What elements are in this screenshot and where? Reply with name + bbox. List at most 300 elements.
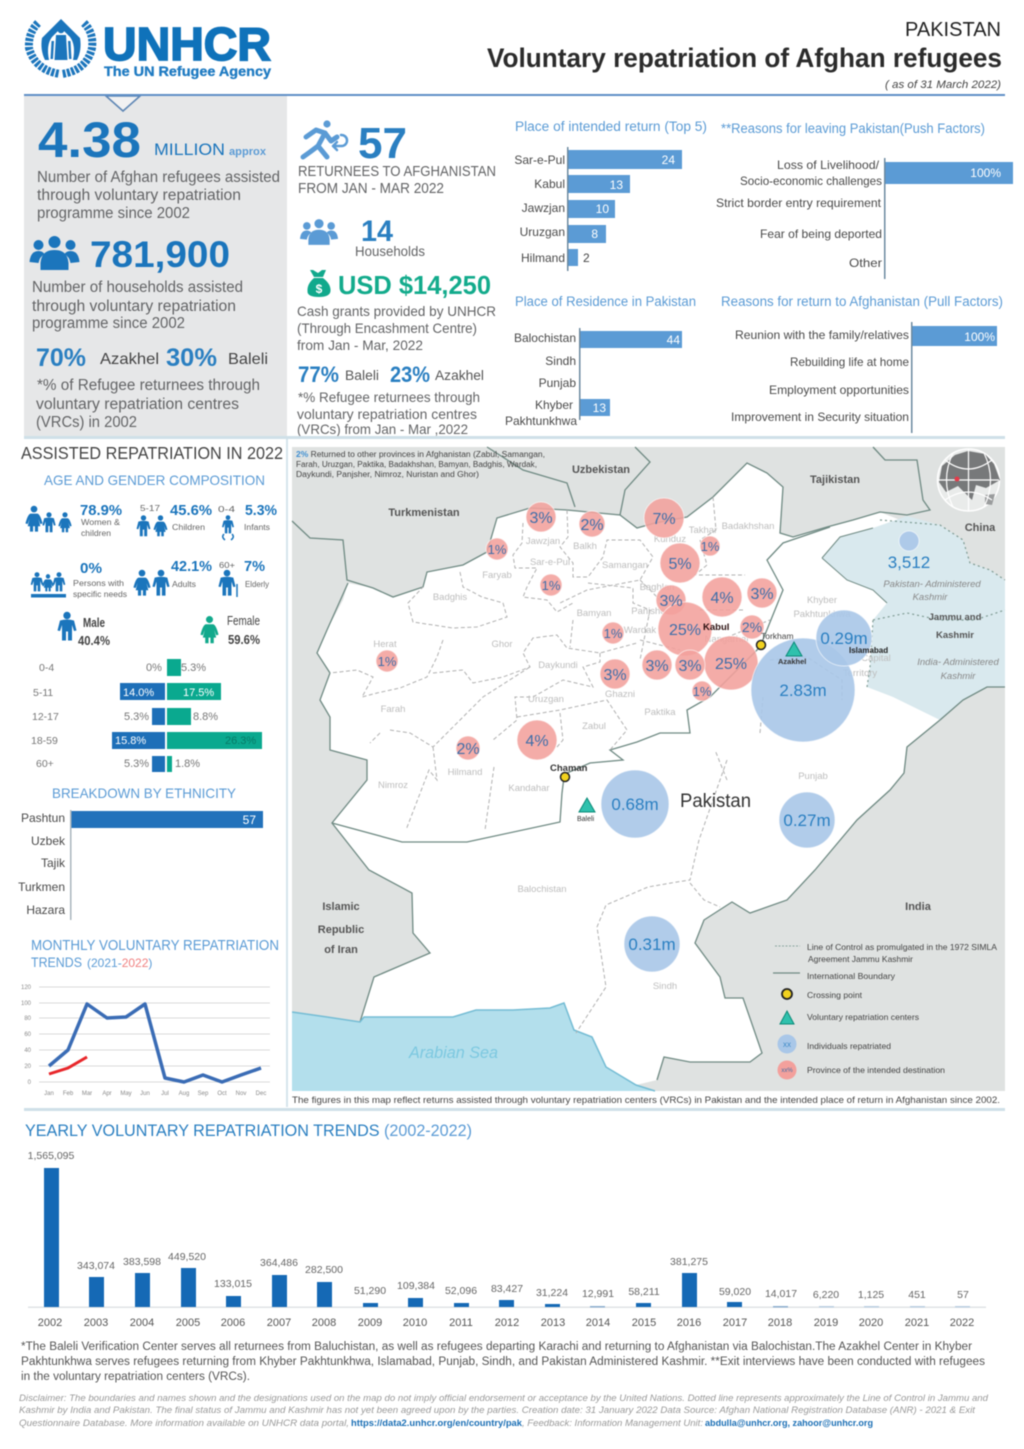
stat: centre split: Baleli bbox=[228, 351, 268, 368]
description: households: Number of households assisted bbox=[32, 279, 243, 296]
bar bbox=[885, 162, 1013, 184]
stat: elderly: 7% bbox=[244, 558, 265, 575]
description: centre split: *% of Refugee returnees through bbox=[37, 377, 260, 394]
year labels: 2006 bbox=[221, 1317, 245, 1329]
province percentages: 1% bbox=[542, 578, 561, 593]
province labels: Ghazni bbox=[605, 689, 635, 700]
province labels: Badghis bbox=[433, 592, 467, 603]
place labels: Kabul bbox=[703, 622, 729, 633]
legend: voluntary repatriation centers bbox=[780, 1011, 919, 1024]
stat: elderly bbox=[219, 558, 269, 589]
stat: adults: 42.1% bbox=[171, 558, 212, 575]
stat: women and children: children bbox=[81, 529, 111, 538]
pyramid values: 17.5% bbox=[183, 687, 214, 699]
country labels: China bbox=[965, 522, 996, 534]
legend: line of control: Agreement Jammu Kashmir bbox=[808, 954, 913, 964]
category labels: Uruzgan bbox=[520, 225, 565, 239]
value: 100% bbox=[970, 166, 1001, 180]
year labels: 2015 bbox=[632, 1317, 656, 1329]
description: centre split: (VRCs) in 2002 bbox=[36, 414, 137, 431]
provincial boundaries bbox=[330, 497, 842, 1033]
stat: centre split: 30% bbox=[166, 344, 217, 372]
province labels: Kunduz bbox=[654, 534, 686, 545]
age labels: 18-59 bbox=[31, 735, 58, 747]
stat: male: Male bbox=[83, 615, 105, 630]
chart: place of residence bbox=[505, 294, 696, 428]
returnee figures: 0.31m bbox=[628, 935, 676, 954]
category labels bbox=[731, 328, 909, 424]
crossing points bbox=[560, 640, 766, 782]
province labels: Sindh bbox=[653, 981, 677, 992]
category labels: Turkmen bbox=[18, 880, 65, 894]
icon: elderly bbox=[218, 570, 237, 597]
value labels: 52,096 bbox=[445, 1285, 477, 1297]
note: other provinces: 2% Returned to other provinces in Afghanistan (Zabul, Samangan, bbox=[296, 450, 545, 459]
axis bbox=[579, 328, 580, 420]
stat: current centre split: Baleli bbox=[345, 367, 379, 383]
stat: current centre split: Azakhel bbox=[435, 367, 484, 383]
category labels bbox=[18, 811, 66, 917]
legend: crossing point bbox=[782, 989, 863, 1000]
description: cash grants: from Jan - Mar, 2022 bbox=[297, 337, 423, 353]
returnee figures: 2.83m bbox=[779, 681, 827, 700]
province percentages: 3% bbox=[678, 658, 702, 675]
y axis labels: 40 bbox=[24, 1048, 32, 1054]
month labels: Jun bbox=[140, 1091, 150, 1097]
stat: centre split bbox=[36, 344, 268, 372]
year labels: 2014 bbox=[586, 1317, 610, 1329]
pointer notch bbox=[106, 96, 140, 111]
stat: children bbox=[140, 502, 212, 532]
chart: age pyramid bbox=[31, 659, 262, 772]
month labels: Aug bbox=[179, 1091, 189, 1097]
stat: male bbox=[78, 615, 110, 648]
country labels: Tajikistan bbox=[810, 474, 860, 486]
stat: persons with specific needs: 0% bbox=[80, 560, 102, 577]
month labels: Mar bbox=[82, 1091, 92, 1097]
year labels: 2008 bbox=[312, 1317, 336, 1329]
value labels: 83,427 bbox=[491, 1283, 523, 1295]
icon: returning runner bbox=[303, 120, 347, 157]
value labels: 449,520 bbox=[168, 1251, 206, 1263]
Kashmir labels: India- Administered bbox=[917, 657, 999, 668]
value labels: 383,598 bbox=[123, 1256, 161, 1268]
value labels: 1,565,095 bbox=[28, 1150, 75, 1162]
chart heading: BREAKDOWN BY ETHNICITY bbox=[52, 785, 237, 801]
province percentages: 4% bbox=[710, 590, 734, 607]
province labels: Uruzgan bbox=[528, 694, 564, 705]
axis bbox=[70, 810, 72, 920]
note: other provinces: Daykundi, Panjsher, Nimroz, Nuristan and Ghor) bbox=[296, 470, 479, 479]
value labels bbox=[28, 1150, 969, 1301]
province labels: Sar-e-Pul bbox=[530, 557, 570, 568]
returnee figures: 0.27m bbox=[783, 811, 831, 830]
value labels: 282,500 bbox=[305, 1264, 343, 1276]
y axis labels: 120 bbox=[21, 985, 32, 991]
Kashmir labels: Pakistan- Administered bbox=[883, 579, 981, 590]
pyramid values: 8.8% bbox=[193, 711, 218, 723]
pyramid values: 5.3% bbox=[181, 662, 206, 674]
month labels: Apr bbox=[102, 1091, 112, 1097]
category labels: Uzbek bbox=[31, 834, 66, 848]
month labels: May bbox=[120, 1091, 132, 1097]
province percentages: 3% bbox=[529, 510, 553, 527]
province percentages: 4% bbox=[525, 733, 549, 750]
legend: crossing point: Crossing point bbox=[807, 990, 863, 1000]
disclaimer: https://data2.unhcr.org/en/country/pak bbox=[351, 1418, 523, 1429]
main title: Voluntary repatriation of Afghan refugees bbox=[487, 43, 1002, 73]
y axis labels: 20 bbox=[24, 1064, 32, 1070]
province labels: Samangan bbox=[602, 560, 648, 571]
chart: yearly repatriation trends bbox=[25, 1121, 986, 1329]
chart: pull factors bbox=[721, 294, 1003, 433]
stat: male: 40.4% bbox=[78, 633, 110, 648]
y axis labels bbox=[21, 985, 32, 1086]
logo wordmark: UNHCR bbox=[103, 18, 271, 70]
category labels: Balochistan bbox=[514, 331, 576, 345]
description: current centre split: voluntary repatriation centres bbox=[297, 406, 477, 422]
province percentages: 3% bbox=[659, 593, 683, 610]
category labels: Rebuilding life at home bbox=[790, 355, 909, 369]
stat: adults bbox=[171, 558, 212, 589]
chart heading: **Reasons for leaving Pakistan(Push Factors) bbox=[721, 121, 985, 136]
bars bbox=[568, 150, 682, 266]
age labels bbox=[31, 662, 59, 770]
disclaimer: , Feedback: Information Management Unit: bbox=[522, 1418, 703, 1429]
year labels: 2005 bbox=[176, 1317, 200, 1329]
province labels: Nimroz bbox=[378, 780, 408, 791]
chart heading bbox=[31, 938, 279, 970]
country labels: of Iran bbox=[324, 944, 358, 956]
category labels: Employment opportunities bbox=[769, 383, 909, 397]
stat: current centre split bbox=[298, 362, 484, 387]
category labels: Tajik bbox=[41, 856, 66, 870]
year labels: 2011 bbox=[449, 1317, 473, 1329]
category labels bbox=[514, 153, 565, 265]
disclaimer: Disclaimer: The boundaries and names shown and the designations used on the map do not imply official endorsement or acceptance by the United Nations. Dotted line represents approximately the Line of Control in Jammu and bbox=[19, 1393, 989, 1404]
category labels: Reunion with the family/relatives bbox=[735, 328, 909, 342]
voluntary repatriation centres bbox=[579, 642, 802, 812]
disclaimer: abdulla@unhcr.org, zahoor@unhcr.org bbox=[705, 1418, 873, 1429]
icon: children bbox=[137, 515, 167, 536]
region: Kashmir bbox=[822, 516, 1005, 720]
stat: current centre split: 77% bbox=[298, 362, 339, 387]
Kashmir labels: Kashmir bbox=[941, 671, 976, 682]
stat: infants: 5.3% bbox=[245, 502, 277, 519]
year labels: 2019 bbox=[814, 1317, 838, 1329]
chart: breakdown by ethnicity bbox=[18, 785, 263, 920]
category labels bbox=[505, 331, 577, 428]
province labels: Daykundi bbox=[538, 660, 578, 671]
description: current centre split: (VRCs) from Jan - Mar ,2022 bbox=[297, 421, 468, 437]
category labels: Pashtun bbox=[21, 811, 65, 825]
legend: province of intended destination: xx% bbox=[781, 1068, 793, 1074]
country labels: Uzbekistan bbox=[572, 464, 630, 476]
line: 2022 bbox=[49, 1057, 87, 1074]
place labels: Chaman bbox=[550, 763, 588, 774]
category labels: Hazara bbox=[26, 903, 65, 917]
male bars bbox=[112, 683, 165, 772]
stat: female: Female bbox=[227, 613, 260, 628]
chart heading: (2021-2022) bbox=[87, 956, 152, 970]
value labels: 57 bbox=[957, 1289, 969, 1301]
place labels: Torkham bbox=[761, 631, 794, 641]
year labels: 2020 bbox=[859, 1317, 883, 1329]
axis bbox=[884, 158, 886, 279]
subheading: age and gender: AGE AND GENDER COMPOSITION bbox=[44, 472, 265, 488]
y axis labels: 100 bbox=[21, 1001, 32, 1007]
value labels: 14,017 bbox=[765, 1288, 797, 1300]
description: refugees assisted: programme since 2002 bbox=[37, 205, 190, 222]
icon: infants bbox=[222, 515, 234, 540]
stat: children: 45.6% bbox=[170, 502, 212, 519]
icon: sheltering hands and person bbox=[41, 19, 81, 60]
values bbox=[583, 153, 675, 265]
returnee figures bbox=[611, 553, 930, 954]
value labels: 1,125 bbox=[858, 1289, 884, 1301]
chart heading: TRENDS bbox=[31, 954, 82, 970]
chart heading: Place of Residence in Pakistan bbox=[515, 294, 696, 309]
header: title block bbox=[487, 19, 1002, 91]
pyramid values: 0% bbox=[146, 662, 162, 674]
value labels: 31,224 bbox=[536, 1287, 568, 1299]
place labels: Azakhel bbox=[778, 657, 806, 666]
chart: push factors bbox=[716, 121, 1013, 279]
value labels: 133,015 bbox=[214, 1278, 252, 1290]
province labels: Paktika bbox=[644, 707, 676, 718]
stat: persons with specific needs bbox=[73, 560, 127, 599]
province labels: Herat bbox=[373, 639, 397, 650]
legend: individuals repatriated: XX bbox=[783, 1043, 791, 1049]
category labels: Fear of being deported bbox=[760, 227, 882, 241]
value labels: 343,074 bbox=[77, 1260, 115, 1272]
month labels: Feb bbox=[63, 1091, 74, 1097]
province labels: Territory bbox=[843, 668, 877, 679]
footnote: centres and exit interviews bbox=[21, 1341, 985, 1383]
year labels: 2009 bbox=[358, 1317, 382, 1329]
map legend bbox=[773, 942, 997, 1080]
year labels: 2012 bbox=[495, 1317, 519, 1329]
legend: voluntary repatriation centers: Voluntary repatriation centers bbox=[807, 1012, 919, 1022]
bar bbox=[912, 326, 997, 346]
value: 57 bbox=[243, 813, 256, 827]
coast line bbox=[292, 1003, 655, 1091]
category labels: Kabul bbox=[534, 177, 565, 191]
year labels: 2018 bbox=[768, 1317, 792, 1329]
year labels bbox=[38, 1317, 974, 1329]
category labels: Punjab bbox=[539, 376, 576, 390]
province labels: Zabul bbox=[582, 721, 606, 732]
line of control bbox=[867, 520, 1005, 687]
category labels: Socio-economic challenges bbox=[740, 174, 882, 188]
province percentages: 3% bbox=[603, 667, 627, 684]
province percentages: 25% bbox=[669, 622, 701, 639]
returnee figures: 3,512 bbox=[888, 553, 930, 572]
legend: individuals repatriated bbox=[778, 1034, 891, 1054]
category labels: Jawzjan bbox=[522, 201, 565, 215]
province labels: Baghlan bbox=[640, 582, 674, 593]
stat: persons with specific needs: Persons with bbox=[73, 579, 124, 588]
province labels: Kandahar bbox=[508, 783, 550, 794]
stat: adults: Adults bbox=[172, 580, 196, 589]
country labels bbox=[318, 464, 996, 956]
province labels: Capital bbox=[861, 653, 891, 664]
y axis labels: 0 bbox=[28, 1080, 32, 1086]
year labels: 2016 bbox=[677, 1317, 701, 1329]
Kashmir labels bbox=[883, 579, 999, 682]
Kashmir labels: Kashmir bbox=[913, 592, 948, 603]
icon: locator globe bbox=[938, 449, 1000, 511]
province labels: Hilmand bbox=[448, 767, 482, 778]
column rule bbox=[286, 439, 288, 1107]
category labels: Strict border entry requirement bbox=[716, 196, 882, 210]
Kashmir labels: Kashmir bbox=[936, 630, 974, 641]
province circles bbox=[376, 498, 777, 760]
section heading: ASSISTED REPATRIATION IN 2022 bbox=[21, 443, 283, 463]
description: households: through voluntary repatriation bbox=[32, 298, 236, 315]
baseline bbox=[28, 1306, 986, 1308]
axis bbox=[567, 147, 568, 271]
value labels: 12,991 bbox=[582, 1288, 614, 1300]
footnote: centres and exit interviews: *The Baleli Verification Center serves all returnees from Baluchistan, as well as refugees departing Karachi and returning to Afghanistan via Balochistan.The Azakhel Center in Khyber bbox=[21, 1341, 972, 1353]
province percentages: 1% bbox=[693, 684, 712, 699]
section rule bbox=[24, 1108, 1005, 1111]
country name: PAKISTAN bbox=[905, 19, 1001, 41]
province percentages: 5% bbox=[668, 556, 692, 573]
province percentages: 2% bbox=[456, 741, 480, 758]
province percentages: 1% bbox=[488, 542, 507, 557]
chart heading: YEARLY VOLUNTARY REPATRIATION TRENDS (2002-2022) bbox=[25, 1121, 472, 1140]
stat: women and children: Women & bbox=[81, 518, 121, 527]
country labels: Islamic bbox=[322, 901, 360, 913]
map caption: The figures in this map reflect returns assisted through voluntary repatriation centers (VRCs) in Pakistan and the intended place of return in Afghanistan since 2002. bbox=[292, 1095, 1000, 1106]
line: 2021 bbox=[49, 1004, 261, 1082]
icon: women and children bbox=[25, 506, 72, 532]
description: centre split: voluntary repatriation centres bbox=[36, 396, 239, 413]
description: cash grants bbox=[297, 303, 496, 353]
province labels: Panjsher bbox=[631, 606, 669, 617]
female bars bbox=[167, 659, 262, 772]
stat: elderly: Elderly bbox=[245, 580, 269, 589]
stat qualifier: approx bbox=[229, 146, 267, 158]
description: returnees: RETURNEES TO AFGHANISTAN bbox=[298, 164, 496, 180]
chart heading: MONTHLY VOLUNTARY REPATRIATION bbox=[31, 938, 279, 954]
category labels: Hilmand bbox=[521, 251, 565, 265]
month labels: Sep bbox=[198, 1091, 209, 1097]
category labels: Other bbox=[849, 256, 882, 270]
month labels bbox=[44, 1091, 266, 1097]
logo tagline: The UN Refugee Agency bbox=[104, 63, 271, 79]
stat: 4.38 million: 4.38 bbox=[38, 112, 141, 168]
disclaimer: Kashmir by India and Pakistan. The final status of Jammu and Kashmir has not yet been agreed upon by the parties. Creation date: 31 January 2022 Data Source: Afghan National Registration Database (ANR) - 2021 & Exit bbox=[19, 1405, 975, 1416]
icon: female bbox=[200, 616, 219, 643]
stat: 14 households: 14 bbox=[361, 215, 393, 248]
place labels: Islamabad bbox=[849, 646, 888, 655]
month labels: Jul bbox=[161, 1091, 169, 1097]
year labels: 2013 bbox=[541, 1317, 565, 1329]
label: Pakistan: Pakistan bbox=[680, 791, 751, 812]
province labels: Badakhshan bbox=[722, 521, 774, 532]
country labels: India bbox=[905, 901, 932, 913]
category labels bbox=[716, 158, 882, 270]
year labels: 2021 bbox=[905, 1317, 929, 1329]
stat: elderly: 60+ bbox=[219, 561, 235, 570]
stat: infants: Infants bbox=[244, 523, 270, 532]
legend: province of intended destination: Province of the intended destination bbox=[807, 1065, 945, 1075]
month labels: Nov bbox=[236, 1091, 246, 1097]
stat: persons with specific needs: specific needs bbox=[73, 590, 127, 599]
pyramid values: 1.8% bbox=[175, 758, 200, 770]
age labels: 0-4 bbox=[39, 662, 54, 674]
label: households: Households bbox=[355, 243, 425, 259]
province labels: Nangarhar bbox=[705, 634, 749, 645]
axis bbox=[911, 322, 912, 433]
category labels: Pakhtunkhwa bbox=[505, 414, 577, 428]
legend: individuals repatriated: Individuals repatriated bbox=[807, 1041, 891, 1051]
stat: women and children: 78.9% bbox=[80, 502, 122, 519]
province percentages: 7% bbox=[652, 511, 676, 528]
returnee circles bbox=[601, 531, 919, 972]
description: refugees assisted: through voluntary repatriation bbox=[37, 187, 241, 204]
icon: money bag: $ bbox=[316, 282, 323, 296]
panel: current year figures bbox=[297, 119, 496, 437]
province labels: Jawzjan bbox=[526, 536, 560, 547]
note: other provinces: Farah, Uruzgan, Paktika, Badakhshan, Bamyan, Badghis, Wardak, bbox=[296, 460, 537, 469]
stat: infants: 0-4 bbox=[218, 505, 236, 514]
header rule bbox=[24, 94, 1005, 96]
note: other provinces bbox=[296, 450, 545, 479]
country labels: Republic bbox=[318, 924, 364, 936]
province percentages: 25% bbox=[715, 656, 747, 673]
icon: laurel wreath bbox=[29, 23, 92, 74]
values: 44 bbox=[667, 333, 680, 347]
disclaimer bbox=[19, 1393, 989, 1429]
bars bbox=[44, 1168, 970, 1308]
value labels: 451 bbox=[908, 1289, 926, 1301]
icon: households bbox=[30, 236, 80, 270]
y axis labels: 60 bbox=[24, 1032, 32, 1038]
legend: line of control bbox=[775, 942, 997, 964]
legend: line of control: Line of Control as promulgated in the 1972 SIMLA bbox=[807, 942, 997, 952]
stat: female: 59.6% bbox=[228, 632, 260, 647]
description: centre split bbox=[36, 377, 260, 431]
year labels: 2007 bbox=[267, 1317, 291, 1329]
description: returnees bbox=[298, 164, 496, 197]
pyramid values: 5.3% bbox=[124, 758, 149, 770]
category labels: Sindh bbox=[545, 354, 576, 368]
year labels: 2004 bbox=[130, 1317, 154, 1329]
panel: overall figures bbox=[24, 96, 287, 436]
stat: female bbox=[227, 613, 260, 647]
value labels: 6,220 bbox=[813, 1289, 839, 1301]
stat: 57 returnees: 57 bbox=[358, 119, 407, 168]
province labels: Wardak bbox=[624, 625, 656, 636]
legend: international boundary bbox=[773, 971, 896, 981]
pyramid values: 15.8% bbox=[115, 735, 146, 747]
land: Afghanistan and Pakistan bbox=[317, 463, 950, 1085]
province percentages: 1% bbox=[701, 539, 720, 554]
y axis labels: 80 bbox=[24, 1016, 32, 1022]
returnee figures: 0.68m bbox=[611, 795, 659, 814]
values bbox=[593, 333, 680, 415]
province labels: Balochistan bbox=[517, 884, 567, 895]
section rule bbox=[24, 436, 1005, 439]
country labels: Turkmenistan bbox=[388, 507, 460, 519]
value labels: 58,211 bbox=[628, 1286, 660, 1298]
description: cash grants: (Through Encashment Centre) bbox=[297, 320, 477, 336]
panel: assisted repatriation demographics bbox=[21, 443, 283, 772]
icon: money bag bbox=[307, 270, 331, 297]
